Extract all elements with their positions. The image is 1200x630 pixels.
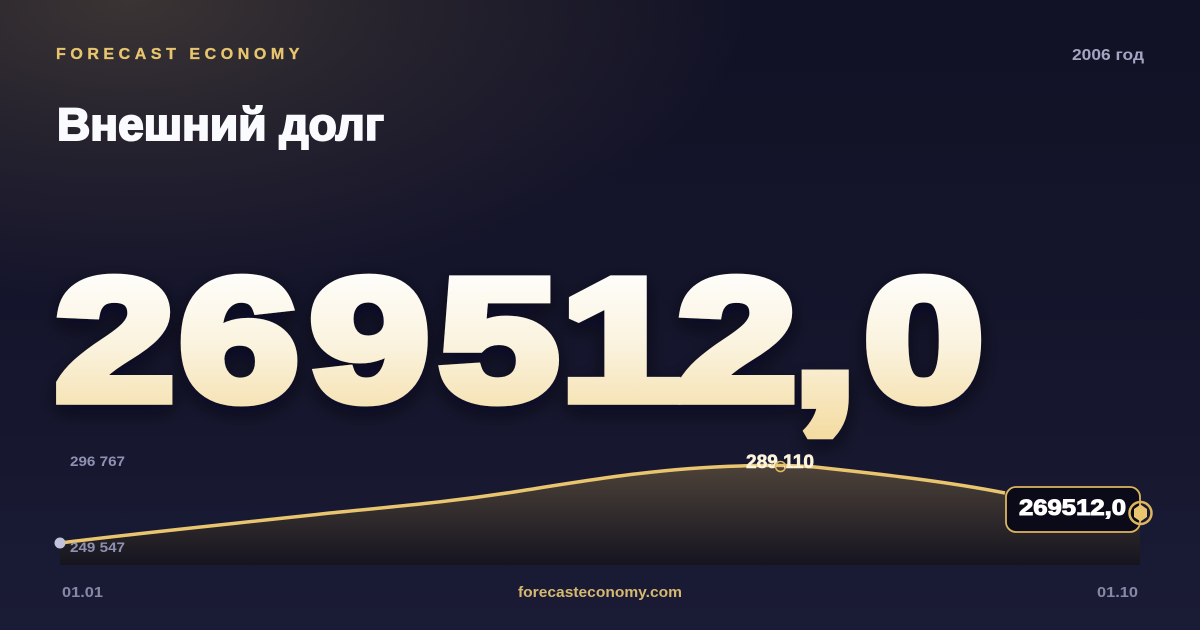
- start point: [54, 538, 66, 548]
- brand label: FORECAST ECONOMY: [56, 46, 304, 63]
- big value: [55, 226, 984, 445]
- peak marker: [776, 462, 786, 472]
- chart line: [60, 465, 1005, 543]
- source url: forecasteconomy.com: [518, 584, 682, 601]
- chart area: [60, 465, 1140, 565]
- axis max: 296 767: [70, 453, 125, 469]
- year label: 2006 год: [1072, 47, 1144, 64]
- peak label: 289 110: [746, 452, 814, 473]
- x axis start: 01.01: [62, 584, 103, 601]
- big value: 9: [310, 244, 429, 437]
- x axis end: 01.10: [1097, 584, 1138, 601]
- big value: 1: [561, 244, 680, 437]
- end marker: [1130, 502, 1152, 524]
- value callout: 269512,0: [1019, 495, 1126, 520]
- title: Внешний долг: [57, 99, 384, 150]
- big value: 2: [55, 244, 175, 437]
- big value: 2: [677, 244, 797, 437]
- value callout: [1006, 487, 1140, 532]
- big value: 6: [179, 244, 299, 437]
- big value: 0: [864, 244, 984, 437]
- chart: [54, 452, 1152, 565]
- big value: 5: [439, 244, 559, 437]
- big value: ,: [791, 226, 859, 445]
- axis min: 249 547: [70, 539, 125, 555]
